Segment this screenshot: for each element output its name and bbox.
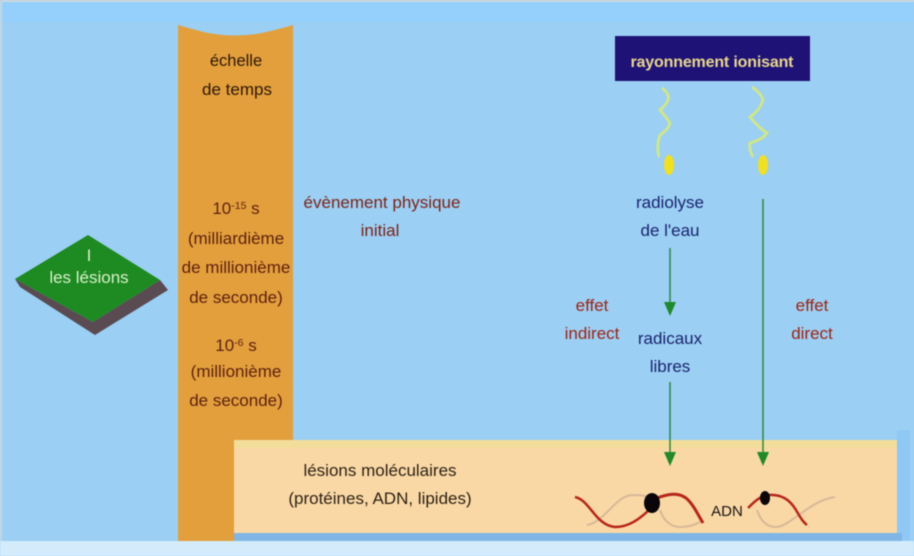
text: effet indirect: effet (576, 296, 608, 315)
time value: 10^-15 s: -15 (231, 200, 247, 212)
text: milliardième de millionième de seconde: (milliardième (188, 229, 284, 248)
arrow: radiolyse to radicaux (664, 248, 676, 316)
text: millionième de seconde: (millionième (191, 362, 281, 381)
arrow: direct effect (757, 199, 769, 466)
text: milliardième de millionième de seconde: de millionième (182, 258, 290, 277)
icon: DNA right (748, 491, 835, 527)
wavy arrow: right radiation (750, 87, 768, 175)
icon: DNA left (575, 493, 703, 527)
time value: 10^-15 s: 10 (212, 199, 231, 218)
text: évènement physique initial: évènement physique (304, 193, 460, 212)
text: milliardième de millionième de seconde: de seconde) (189, 288, 283, 307)
time value: 10^-6 s: s (244, 336, 257, 355)
text: millionième de seconde: de seconde) (189, 391, 283, 410)
diamond: les lésions (15, 235, 168, 335)
time value: 10^-6 s: 10 (215, 336, 234, 355)
panel: lésions moléculaires (234, 440, 902, 541)
box: rayonnement ionisant: rayonnement ionisant (630, 54, 794, 71)
text: effet direct: effet (796, 296, 828, 315)
time value: 10^-15 s: s (246, 199, 260, 218)
text: évènement physique initial: initial (361, 221, 399, 240)
time scale column (178, 25, 293, 541)
text: ADN: ADN (711, 503, 743, 520)
text: effet direct: direct (791, 324, 833, 343)
box: rayonnement ionisant (615, 36, 810, 81)
heading: de temps: de temps (202, 80, 272, 99)
text: radicaux libres: libres (650, 357, 690, 376)
diamond label: I (87, 246, 91, 265)
time value: 10^-6 s: -6 (234, 337, 244, 349)
heading: échelle: échelle (210, 52, 262, 70)
text: effet indirect: indirect (565, 324, 620, 343)
diamond label: les lésions (49, 268, 129, 287)
text: radicaux libres: radicaux (638, 329, 702, 348)
wavy arrow: left radiation (658, 88, 674, 175)
text: lésions moléculaires: lésions moléculaires (303, 461, 457, 480)
text: lésions moléculaires: (protéines, ADN, lipides) (288, 489, 472, 508)
arrow: radicaux to lesions (664, 382, 676, 466)
text: radiolyse de l'eau: de l'eau (640, 221, 700, 240)
text: radiolyse de l'eau: radiolyse (636, 193, 704, 212)
